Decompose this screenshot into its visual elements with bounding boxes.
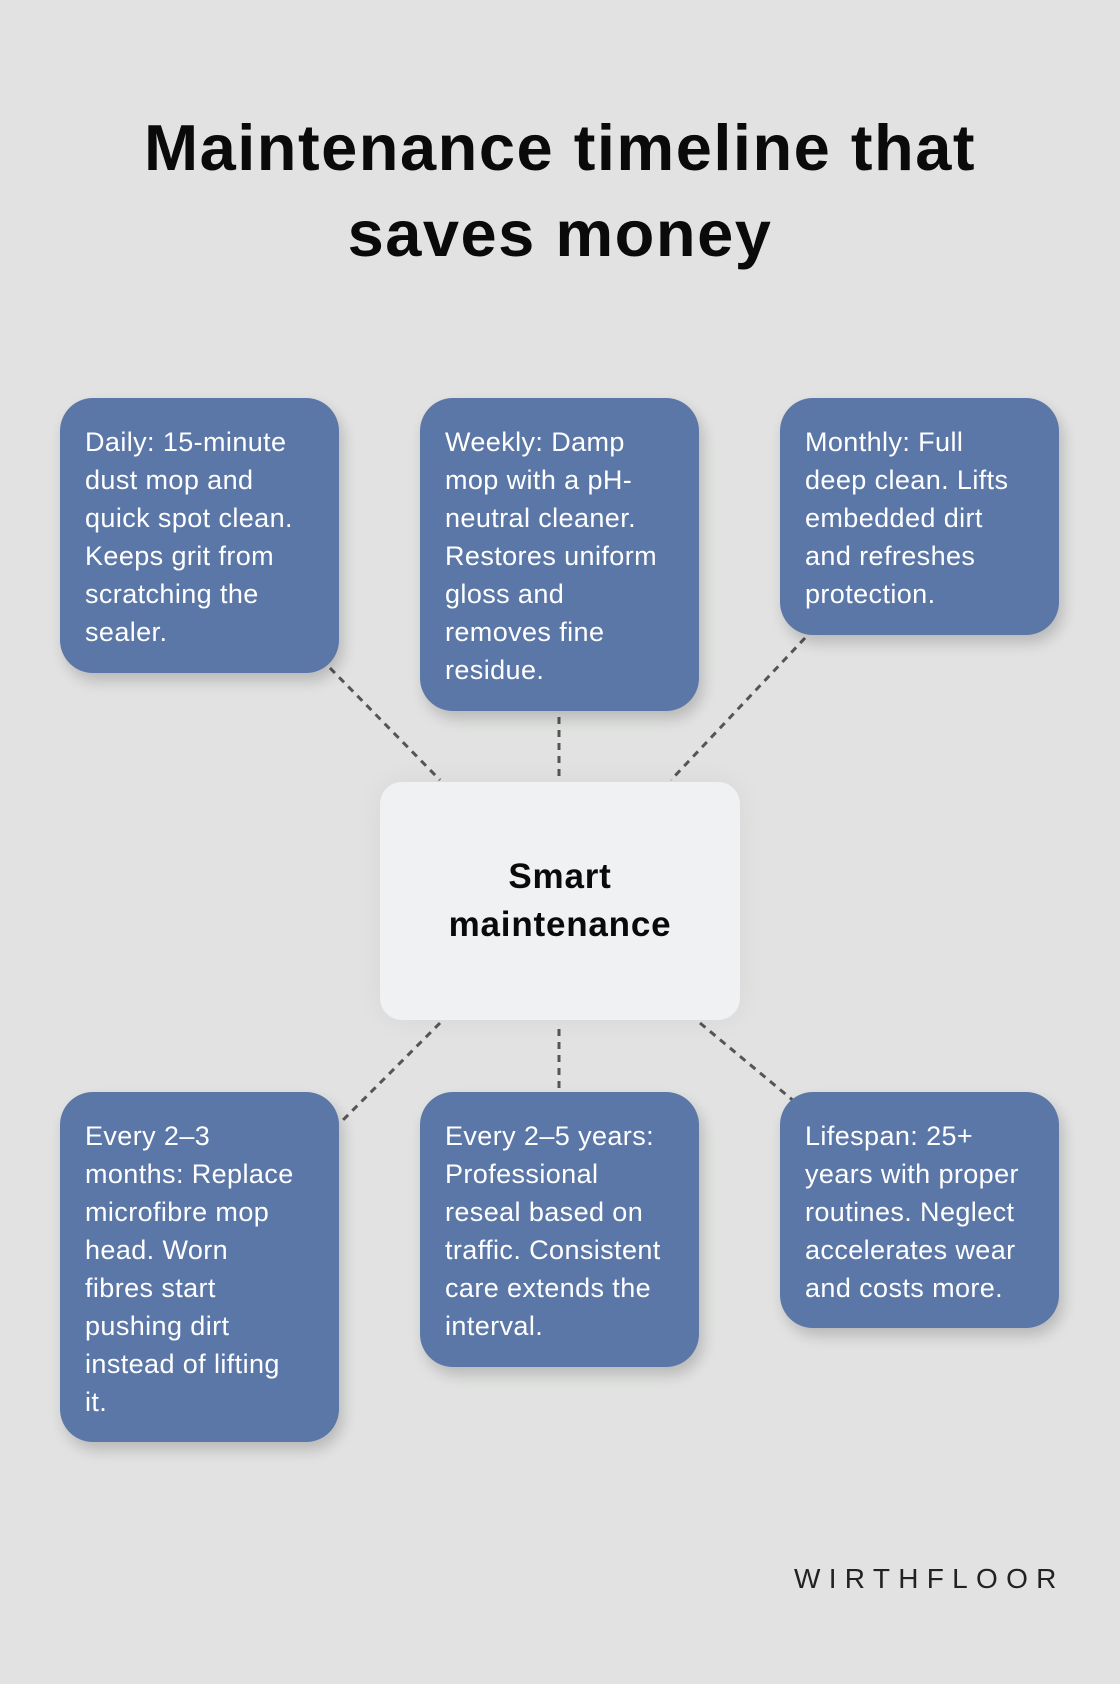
box: every 2-3 months: Every 2–3 (85, 1121, 210, 1151)
box: weekly: gloss and (445, 579, 564, 609)
title: saves money (348, 197, 772, 270)
box: lifespan: accelerates wear (805, 1235, 1016, 1265)
box: every 2-5 years: reseal based on (445, 1197, 643, 1227)
box: every 2-3 months: instead of lifting (85, 1349, 280, 1379)
box: monthly: deep clean. Lifts (805, 465, 1008, 495)
title: Maintenance timeline that (144, 111, 976, 184)
box: weekly (420, 398, 699, 711)
box: every 2-3 months: it. (85, 1387, 107, 1417)
box: weekly: neutral cleaner. (445, 503, 636, 533)
box: lifespan: Lifespan: 25+ (805, 1121, 973, 1151)
box: monthly: and refreshes (805, 541, 975, 571)
box: weekly: Weekly: Damp (445, 427, 625, 457)
box: monthly: Monthly: Full (805, 427, 963, 457)
box: every 2-5 years: traffic. Consistent (445, 1235, 661, 1265)
box: every 2-3 months: fibres start (85, 1273, 216, 1303)
box: lifespan: and costs more. (805, 1273, 1003, 1303)
box: daily: quick spot clean. (85, 503, 293, 533)
box: daily: dust mop and (85, 465, 253, 495)
box: every 2-3 months (60, 1092, 339, 1442)
box: every 2-3 months: head. Worn (85, 1235, 228, 1265)
box: daily: scratching the (85, 579, 259, 609)
box: weekly: mop with a pH- (445, 465, 632, 495)
center: smart maintenance (380, 782, 740, 1020)
box: every 2-3 months: pushing dirt (85, 1311, 229, 1341)
box: lifespan: years with proper (805, 1159, 1019, 1189)
box: every 2-5 years: care extends the (445, 1273, 651, 1303)
box: every 2-3 months: months: Replace (85, 1159, 294, 1189)
box: monthly: protection. (805, 579, 935, 609)
box: lifespan: routines. Neglect (805, 1197, 1014, 1227)
box: monthly: embedded dirt (805, 503, 983, 533)
box: every 2-5 years: Every 2–5 years: (445, 1121, 654, 1151)
box: every 2-5 years (420, 1092, 699, 1367)
box: weekly: Restores uniform (445, 541, 657, 571)
box: weekly: removes fine (445, 617, 604, 647)
box: every 2-5 years: Professional (445, 1159, 598, 1189)
box: daily: Daily: 15-minute (85, 427, 286, 457)
logo: WIRTHFLOOR (794, 1563, 1065, 1594)
box: daily: Keeps grit from (85, 541, 274, 571)
box: weekly: residue. (445, 655, 544, 685)
box: daily (60, 398, 339, 673)
box: every 2-5 years: interval. (445, 1311, 543, 1341)
center: smart maintenance: maintenance (449, 905, 671, 944)
box: every 2-3 months: microfibre mop (85, 1197, 269, 1227)
box: lifespan (780, 1092, 1059, 1328)
center: smart maintenance: Smart (508, 857, 612, 896)
box: daily: sealer. (85, 617, 167, 647)
title (144, 111, 976, 270)
box: monthly (780, 398, 1059, 635)
